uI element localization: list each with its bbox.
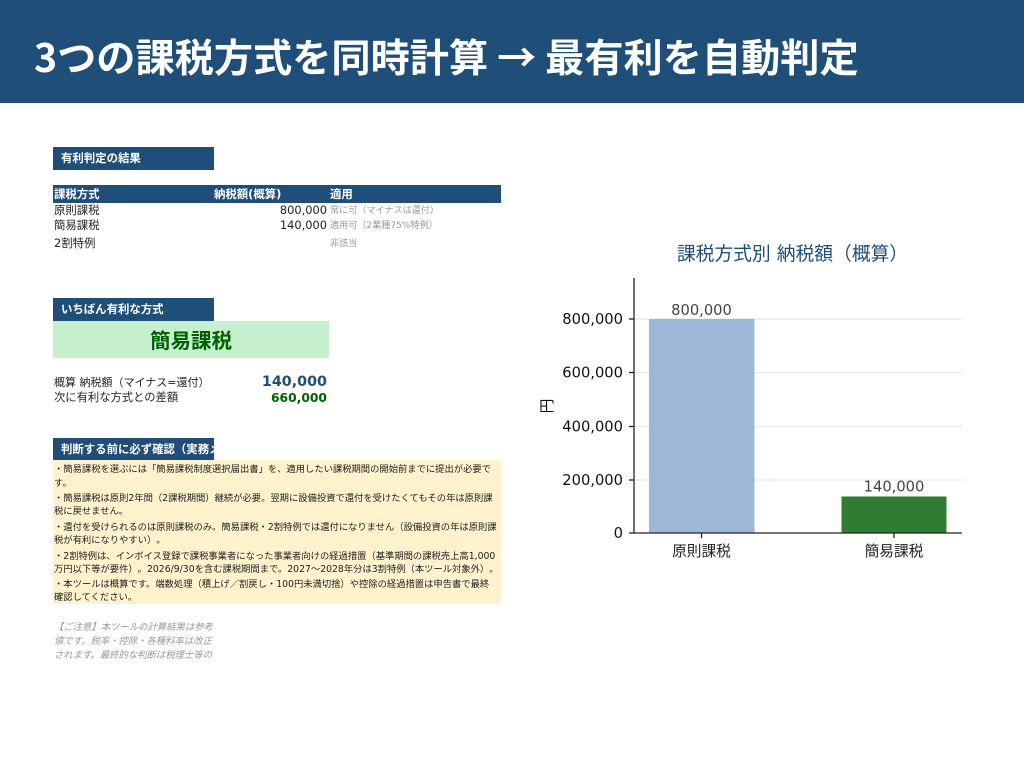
note 5 (54, 578, 489, 603)
row: 原則課税 (54, 203, 439, 217)
row: 2割特例: 2割特例 (54, 236, 95, 250)
notes panel (53, 460, 501, 604)
y axis labels: 200,000 (562, 472, 623, 489)
y axis title: 円 (539, 399, 556, 413)
note 4: 万円以下等が要件）。2026/9/30を含む課税期間まで。2027〜2028年分は3割特例（本ツール対象外）。 (54, 564, 499, 575)
table header (53, 185, 501, 203)
note 2: ・簡易課税は原則2年間（2課税期間）継続が必要。翌期に設備投資で還付を受けたくてもその年は原則課 (54, 492, 493, 504)
note 2: 税に戻せません。 (54, 506, 128, 517)
note 5: 確認してください。 (54, 592, 137, 603)
value labels: 140,000 (864, 478, 924, 496)
heading: check before deciding (53, 438, 214, 461)
result highlight: 簡易課税 (150, 329, 232, 353)
note 4 (54, 550, 499, 575)
table header: 適用 (330, 187, 353, 201)
heading: best method (53, 298, 214, 321)
heading: result (53, 147, 214, 170)
row: 簡易課税: 適用可（2業種75%特例） (330, 221, 438, 231)
title banner: 3つの課税方式を同時計算 → 最有利を自動判定 (34, 28, 859, 84)
estimated tax row (54, 374, 327, 390)
note 2 (54, 492, 493, 517)
value labels: 800,000 (671, 302, 732, 319)
y axis labels: 600,000 (562, 364, 623, 382)
disclaimer (54, 622, 214, 661)
note 1: ・簡易課税を選ぶには「簡易課税制度選択届出書」を、適用したい課税期間の開始前までに提出が必要で (54, 464, 491, 475)
row: 2割特例: 非該当 (330, 239, 357, 249)
row: 原則課税: 原則課税 (54, 203, 100, 217)
note 4: ・2割特例は、インボイス登録で課税事業者になった事業者向けの経過措置（基準期間の課税売上高1,000 (54, 550, 495, 562)
y axis labels: 400,000 (562, 418, 623, 436)
chart title: 課税方式別 納税額（概算） (677, 243, 908, 265)
row: 簡易課税: 簡易課税 (54, 218, 100, 232)
disclaimer: 【ご注意】本ツールの計算結果は参考 (54, 622, 213, 633)
x axis labels: 簡易課税 (865, 543, 924, 560)
result highlight (53, 321, 329, 358)
value labels (671, 302, 924, 496)
y axis labels (562, 311, 623, 542)
panel: result table (53, 147, 501, 250)
row: 簡易課税: 140,000 (280, 218, 327, 232)
estimated tax row: 140,000 (262, 374, 327, 390)
difference row (54, 391, 327, 405)
disclaimer: されます。最終的な判断は税理士等の (54, 650, 212, 661)
title banner (0, 0, 1024, 103)
note 1 (54, 464, 491, 488)
bar: 簡易課税 (842, 496, 946, 533)
note 3: ・還付を受けられるのは原則課税のみ。簡易課税・2割特例では還付になりません（設備投資の年は原則課 (54, 522, 497, 532)
note 3: 税が有利になりやすい）。 (54, 535, 166, 546)
note 5: ・本ツールは概算です。端数処理（積上げ／割戻し・100円未満切捨）や控除の経過措置は申告書で最終 (54, 578, 489, 590)
estimated tax row: 概算 納税額（マイナス=還付） (54, 376, 210, 389)
note 1: す。 (54, 478, 72, 488)
panel: best method (53, 298, 329, 405)
y axis labels: 0 (614, 525, 623, 542)
bar: 原則課税 (649, 319, 754, 533)
note 3 (54, 522, 497, 546)
difference row: 660,000 (271, 391, 327, 405)
x axis labels (672, 543, 924, 560)
row: 簡易課税 (54, 218, 438, 232)
x axis labels: 原則課税 (672, 543, 731, 560)
row: 2割特例 (54, 236, 357, 250)
table header: 課税方式 (54, 187, 100, 201)
disclaimer: 値です。税率・控除・各種料率は改正 (54, 636, 212, 647)
row: 原則課税: 常に可（マイナスは還付） (330, 206, 439, 216)
heading: result: 有利判定の結果 (61, 151, 141, 165)
difference row: 次に有利な方式との差額 (54, 391, 178, 404)
bar chart (539, 243, 962, 560)
row: 原則課税: 800,000 (280, 203, 327, 217)
table header: 納税額(概算) (214, 187, 281, 201)
y axis labels: 800,000 (562, 311, 623, 328)
heading: best method: いちばん有利な方式 (61, 302, 164, 316)
